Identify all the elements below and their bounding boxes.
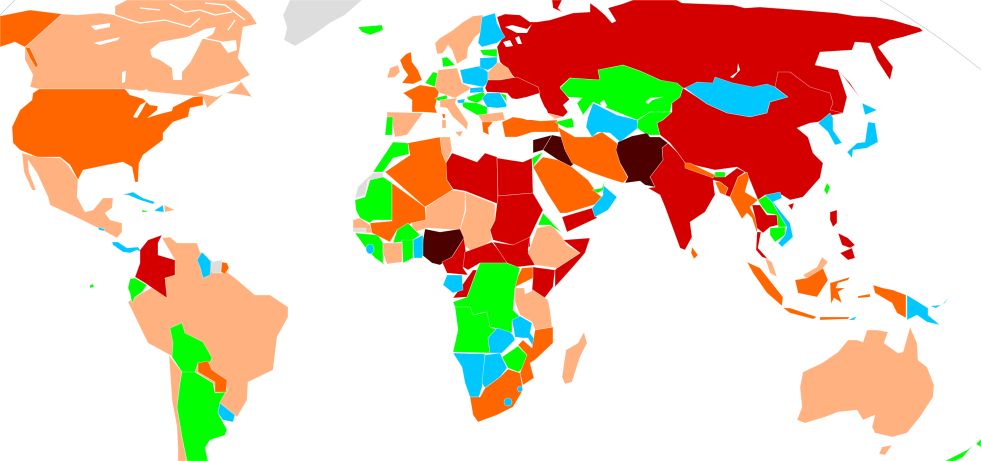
- mali: [370, 183, 426, 242]
- jordan: [532, 152, 543, 167]
- mauritania: [355, 177, 392, 223]
- sri lanka: [691, 247, 698, 259]
- senegal: [353, 218, 372, 233]
- slovenia: [457, 99, 465, 103]
- mindanao: [840, 248, 855, 260]
- caucasus: [555, 118, 575, 128]
- mexico and central america: [22, 153, 122, 238]
- canada: [25, 0, 257, 108]
- lesotho: [504, 398, 512, 406]
- mongolia: [685, 77, 788, 117]
- lake onega: [515, 36, 522, 44]
- region: europe: [358, 0, 923, 137]
- new zealand: [945, 445, 973, 461]
- kyrgyzstan and tajikistan: [637, 112, 672, 135]
- foxe basin: [187, 27, 216, 39]
- poland: [460, 66, 488, 87]
- suriname: [211, 260, 222, 273]
- denmark: [442, 57, 455, 67]
- aral sea: [600, 100, 607, 108]
- slovakia: [470, 87, 484, 93]
- oman: [592, 185, 617, 217]
- eritrea: [538, 213, 562, 233]
- sakhalin: [840, 72, 860, 98]
- ghana: [402, 240, 413, 263]
- dominican republic: [164, 205, 175, 212]
- western new guinea: [873, 285, 906, 318]
- iceland: [358, 25, 383, 35]
- taiwan: [824, 183, 830, 195]
- cambodia: [770, 227, 785, 242]
- hungary: [467, 92, 487, 103]
- dr congo: [453, 263, 520, 333]
- white water: black sea and arctic inlets: [503, 24, 740, 137]
- kazakhstan: [560, 65, 683, 120]
- germany and austria: [435, 68, 472, 98]
- sulawesi: [830, 277, 850, 304]
- uae: [592, 180, 605, 193]
- papua new guinea: [907, 295, 940, 325]
- yemen: [562, 208, 597, 232]
- region: oceania: [797, 327, 981, 461]
- saudi arabia: [533, 157, 603, 213]
- egypt: [497, 158, 533, 196]
- greece: [482, 122, 493, 135]
- australia: [797, 327, 934, 437]
- cuba: [122, 192, 155, 204]
- belarus: [488, 62, 514, 80]
- thailand: [752, 205, 778, 233]
- hainan: [788, 203, 794, 210]
- ecuador: [128, 278, 147, 303]
- cameroon: [442, 238, 468, 275]
- namibia: [453, 353, 485, 397]
- bangladesh: [715, 182, 728, 195]
- benin and togo: [413, 235, 423, 258]
- black sea: [503, 97, 548, 120]
- balkans: [462, 102, 487, 115]
- novaya zemlya: [552, 0, 562, 12]
- china: [657, 72, 843, 200]
- lake baikal: [730, 63, 740, 78]
- zambia: [488, 328, 515, 353]
- new zealand north: [976, 439, 981, 447]
- south africa: [470, 369, 523, 422]
- angola: [453, 307, 497, 353]
- usa: [12, 89, 203, 182]
- region: south america: [90, 235, 288, 461]
- gulf of st lawrence: [197, 80, 243, 97]
- mozambique: [518, 327, 553, 385]
- haiti: [155, 205, 164, 212]
- benelux: [425, 72, 438, 87]
- lake michigan: [133, 101, 147, 118]
- new britain: [930, 298, 948, 308]
- sierra leone: [366, 244, 374, 254]
- jamaica: [142, 210, 147, 212]
- ireland: [387, 65, 400, 78]
- greenland: [283, 0, 362, 46]
- ivory coast: [383, 243, 402, 264]
- alaska panhandle: [25, 47, 38, 68]
- madagascar: [562, 332, 587, 384]
- sudan: [490, 193, 543, 247]
- brazil and peach neighbours: [128, 237, 288, 417]
- libya: [446, 153, 498, 204]
- guinea and liberia: [355, 233, 385, 265]
- south sudan: [493, 237, 535, 267]
- bulgaria: [478, 112, 505, 123]
- india: [648, 143, 745, 250]
- malawi: [512, 316, 535, 350]
- arctic channels: [115, 3, 245, 42]
- laos: [758, 195, 787, 227]
- ethiopia: [528, 225, 580, 268]
- nepal: [685, 163, 715, 178]
- georgia: [547, 113, 563, 119]
- western sahara: [355, 173, 383, 198]
- tanzania: [515, 288, 552, 330]
- nigeria: [422, 229, 464, 265]
- luzon: [830, 210, 837, 227]
- zimbabwe: [502, 346, 527, 372]
- turkey: [502, 117, 560, 137]
- italy: [440, 98, 468, 130]
- region: africa: [353, 137, 590, 422]
- russia: [497, 0, 923, 122]
- guinea bissau: [353, 228, 366, 232]
- botswana: [482, 353, 507, 388]
- uganda: [515, 267, 535, 287]
- morocco: [373, 142, 409, 172]
- tunisia: [440, 137, 452, 163]
- romania: [482, 93, 508, 108]
- el salvador: [98, 227, 105, 231]
- great lakes: [130, 89, 173, 118]
- niger: [412, 190, 465, 233]
- sardinia: [442, 120, 446, 128]
- sicily: [455, 131, 463, 137]
- timor: [848, 316, 857, 320]
- spain: [387, 112, 423, 137]
- visayas: [838, 233, 855, 248]
- bolivia: [170, 323, 212, 372]
- chad: [460, 192, 495, 253]
- korea: [818, 113, 842, 145]
- white water: canada: [91, 3, 245, 118]
- iraq: [543, 135, 575, 167]
- lake winnipeg: [122, 71, 126, 83]
- bhutan: [715, 172, 725, 177]
- region: middle east and central asia: [532, 65, 788, 232]
- syria: [533, 135, 552, 153]
- borneo: [795, 268, 828, 297]
- region: south and east asia: [616, 72, 948, 325]
- france: [403, 85, 440, 113]
- map projection outline: [0, 0, 981, 70]
- guyana: [197, 252, 211, 278]
- region: north america: [0, 0, 362, 253]
- hokkaido: [862, 103, 877, 115]
- lesser sunda islands: [820, 317, 850, 320]
- peninsular malaysia: [765, 258, 777, 277]
- uruguay: [218, 403, 235, 422]
- chile: [169, 355, 187, 461]
- eswatini: [518, 386, 522, 392]
- costa rica and panama: [112, 242, 142, 253]
- gabon: [443, 275, 463, 293]
- sumatra: [747, 262, 783, 306]
- vietnam: [765, 192, 793, 247]
- lake ladoga: [503, 40, 513, 47]
- algeria: [385, 137, 453, 207]
- kenya: [532, 267, 555, 300]
- iran: [558, 127, 628, 183]
- tasmania: [879, 445, 892, 455]
- ukraine: [485, 77, 540, 100]
- uk: [400, 52, 422, 84]
- colombia: [135, 235, 175, 298]
- paraguay: [198, 361, 227, 392]
- latvia and lithuania: [480, 57, 497, 70]
- alaska: [0, 10, 62, 47]
- estonia: [480, 49, 497, 57]
- central african republic: [463, 242, 507, 270]
- moldova: [500, 93, 507, 102]
- maluku: [858, 294, 870, 298]
- republic of congo: [453, 270, 477, 298]
- norway and sweden: [435, 15, 483, 64]
- afghanistan and pakistan: [616, 133, 668, 187]
- turkmenistan and uzbekistan: [586, 103, 638, 142]
- lake balkhash: [646, 97, 663, 104]
- java: [783, 308, 817, 319]
- thailand peninsula: [756, 232, 768, 259]
- finland: [478, 13, 505, 47]
- ungava bay: [220, 40, 237, 53]
- caspian sea: [563, 97, 592, 137]
- lake victoria: [524, 282, 532, 294]
- honshu and kyushu: [847, 122, 878, 158]
- argentina: [177, 372, 228, 461]
- myanmar: [730, 172, 758, 233]
- burkina faso: [393, 223, 420, 243]
- sabah and sarawak: [803, 257, 828, 279]
- great slave and bear lakes: [91, 23, 110, 30]
- hudson bay: [150, 37, 203, 80]
- galapagos: [90, 284, 94, 288]
- somalia: [555, 238, 590, 287]
- switzerland: [435, 95, 447, 101]
- portugal: [385, 117, 393, 135]
- french guiana: [221, 262, 229, 274]
- white sea: [505, 24, 532, 33]
- corsica: [442, 114, 445, 118]
